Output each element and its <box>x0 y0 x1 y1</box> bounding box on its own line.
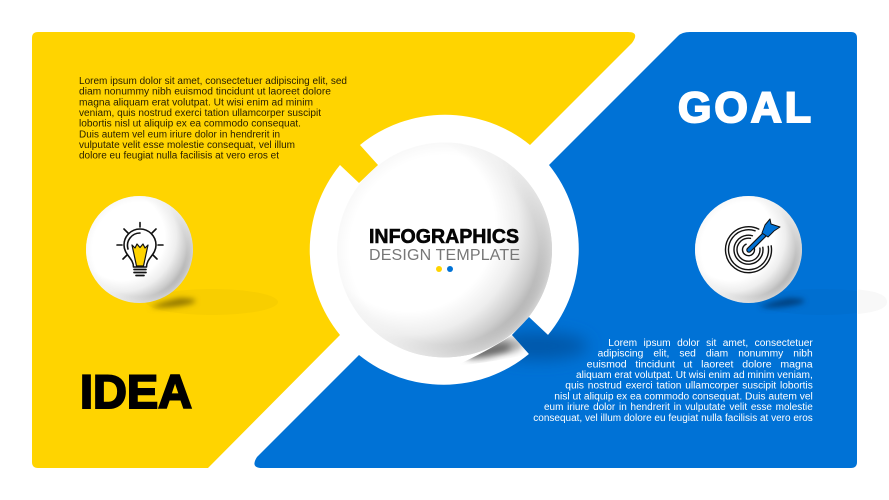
heading: idea: IDEA <box>80 365 192 418</box>
shadow: idea sphere <box>146 289 278 315</box>
heading: infographics: INFOGRAPHICS <box>369 226 519 248</box>
shadow: central sphere on blue panel <box>488 332 588 360</box>
text block: idea description: dolore eu feugiat nulla facilisis at vero eros et <box>79 151 279 162</box>
icon: light bulb <box>117 222 163 276</box>
text block: goal description: euismod tincidunt ut laoreet dolore magna <box>587 359 813 370</box>
text block: idea description: veniam, quis nostrud exerci tation ullamcorper suscipit <box>79 108 321 119</box>
text block: goal description: adipiscing elit, sed diam nonummy nibh <box>598 349 813 360</box>
text block: goal description: eum iriure dolor in hendrerit in vulputate velit esse molestie <box>544 402 813 413</box>
text block: goal description: aliquam erat volutpat. Ut wisi enim ad minim veniam, <box>576 370 813 381</box>
dot: blue <box>447 266 453 272</box>
shadow: central sphere tab <box>463 337 523 362</box>
icon: target with arrow <box>723 219 780 276</box>
panel: idea <box>32 32 635 468</box>
sphere: idea <box>86 196 193 303</box>
dot: yellow <box>436 266 442 272</box>
heading: goal: GOAL <box>678 84 811 132</box>
text block: idea description: Lorem ipsum dolor sit amet, consectetuer adipiscing elit, sed <box>79 76 347 87</box>
central title <box>369 226 520 272</box>
text block: goal description: quis nostrud exerci tation ullamcorper suscipit lobortis <box>565 381 813 392</box>
shadow: goal sphere <box>758 293 808 312</box>
text block: goal description: nisl ut aliquip ex ea commodo consequat. Duis autem vel <box>554 391 813 402</box>
panel: goal <box>254 32 857 468</box>
text block: goal description: consequat, vel illum dolore eu feugiat nulla facilisis at vero eros <box>533 413 813 424</box>
text block: idea description: magna aliquam erat volutpat. Ut wisi enim ad minim <box>79 97 313 108</box>
sphere: goal <box>695 196 802 303</box>
central sphere <box>337 142 552 358</box>
subheading: design template: DESIGN TEMPLATE <box>369 247 520 264</box>
text block: idea description: vulputate velit esse molestie consequat, vel illum <box>79 140 295 151</box>
text block: goal description <box>533 338 813 424</box>
text block: idea description: diam nonummy nibh euismod tincidunt ut laoreet dolore <box>79 87 331 98</box>
text block: goal description: Lorem ipsum dolor sit amet, consectetuer <box>608 338 813 349</box>
text block: idea description: lobortis nisl ut aliquip ex ea commodo consequat. <box>79 119 301 130</box>
text block: idea description <box>79 76 347 162</box>
text block: idea description: Duis autem vel eum iriure dolor in hendrerit in <box>79 129 280 140</box>
